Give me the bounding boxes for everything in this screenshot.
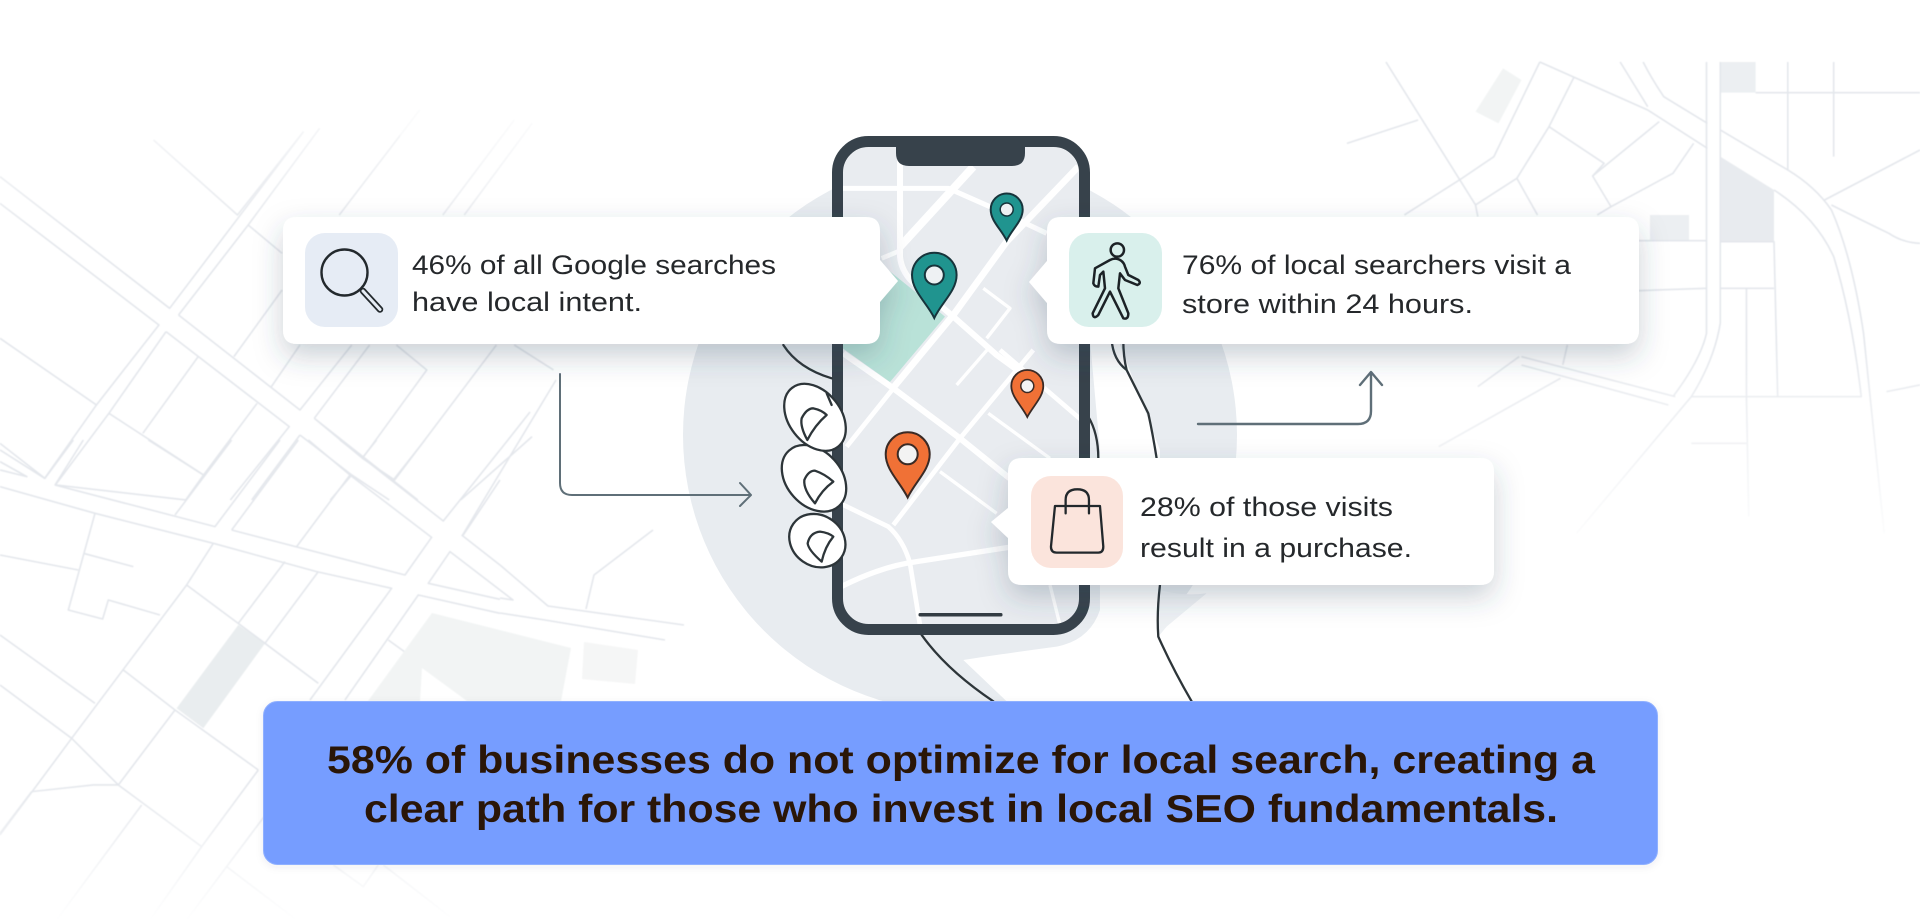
pin hole	[1021, 380, 1034, 392]
card: search stat	[283, 217, 898, 344]
icon: teal map pin large	[912, 253, 957, 318]
text: have local intent.	[412, 287, 642, 317]
callout: key takeaway banner	[264, 702, 1658, 864]
text: 76% of local searchers visit a	[1182, 250, 1572, 280]
card: purchase stat	[991, 458, 1494, 585]
text: 28% of those visits	[1140, 492, 1393, 522]
pin hole	[898, 444, 918, 464]
hand holding phone	[922, 340, 1207, 701]
card body	[1029, 217, 1639, 344]
pin hole	[1000, 203, 1013, 216]
grey circle behind phone	[683, 158, 1237, 712]
card: store visit stat	[1029, 217, 1639, 344]
card body	[283, 217, 898, 344]
fingers	[769, 345, 859, 578]
icon: shopping bag	[1031, 476, 1123, 568]
home bar	[918, 613, 1002, 616]
banner text: 58% of businesses do not optimize for local search, creating a	[327, 739, 1595, 782]
banner background	[264, 702, 1658, 864]
arrow: from phone to store visit card	[1198, 372, 1382, 424]
text: store within 24 hours.	[1182, 289, 1473, 319]
phone	[838, 140, 1084, 630]
text: 46% of all Google searches	[412, 250, 776, 280]
green park area	[843, 263, 945, 382]
text: result in a purchase.	[1140, 533, 1412, 563]
phone frame	[838, 142, 1084, 630]
pin hole	[925, 266, 944, 284]
banner text: clear path for those who invest in local SEO fundamentals.	[364, 788, 1558, 831]
arrow: from search card to phone	[560, 374, 751, 506]
icon: walking person	[1069, 233, 1162, 327]
card body	[991, 458, 1494, 585]
icon: teal map pin small	[991, 194, 1023, 240]
notch	[896, 140, 1025, 166]
map screen	[843, 147, 1079, 625]
icon: orange map pin large	[886, 432, 930, 498]
icon: magnifier	[305, 233, 398, 327]
icon: orange map pin small	[1011, 370, 1043, 417]
